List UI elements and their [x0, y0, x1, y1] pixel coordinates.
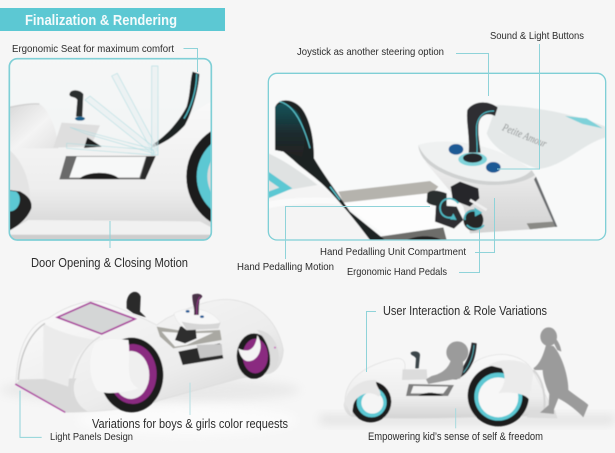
callout: ergonomic seat — [12, 43, 198, 72]
rear body — [268, 153, 378, 240]
pedalling motion arrows — [440, 199, 484, 229]
illustration: child riding and child pushing — [320, 327, 615, 428]
callout: hand pedalling unit compartment — [320, 198, 494, 258]
dashboard top — [418, 141, 532, 182]
callout: sound and light buttons — [490, 30, 584, 169]
leader line: colour variations — [188, 383, 191, 415]
silhouette: seated child — [426, 341, 468, 384]
roof light panel — [57, 303, 135, 334]
callout: door opening and closing motion: Door Opening & Closing Motion — [31, 256, 188, 270]
callout: light panels design: Light Panels Design — [50, 431, 133, 443]
cutout windows — [402, 369, 427, 380]
joystick — [458, 102, 498, 166]
main body — [16, 299, 283, 412]
rear fender — [488, 360, 533, 400]
vehicle body — [344, 354, 557, 418]
logotype on cowl: Petite Amour — [500, 121, 549, 150]
dashboard — [174, 309, 220, 330]
seat — [127, 292, 146, 317]
seat — [275, 100, 385, 240]
callout: hand pedalling motion — [237, 206, 430, 273]
title banner: Finalization & Rendering — [25, 12, 177, 29]
sound and light buttons — [449, 144, 501, 173]
pusher handle — [533, 370, 545, 417]
lower dashboard — [425, 162, 557, 233]
front hump — [9, 104, 58, 148]
right wheel — [237, 333, 271, 379]
callout: ergonomic seat: Ergonomic Seat for maximum comfort — [12, 43, 174, 55]
callout: ergonomic hand pedals — [347, 230, 480, 278]
joystick — [192, 294, 202, 315]
heading: user interaction and role variations: User Interaction & Role Variations — [383, 304, 547, 318]
dashboard — [53, 123, 100, 148]
lower sill — [10, 220, 210, 234]
door ghost positions — [67, 66, 158, 155]
rear cargo light panel — [16, 378, 88, 412]
leader line: sense of freedom — [454, 408, 457, 428]
joystick — [69, 90, 83, 117]
callout: joystick — [297, 46, 488, 96]
callout: colour variations: Variations for boys & girls color requests — [92, 417, 288, 431]
seat — [452, 343, 477, 379]
callout: empowering sense of self: Empowering kid’s sense of self & freedom — [368, 431, 543, 443]
door opening cutout — [59, 156, 156, 179]
front fender — [10, 152, 28, 190]
vehicle body, side view — [18, 195, 210, 227]
rear wheel — [468, 365, 529, 426]
lower door bar — [373, 227, 447, 240]
callout: hand pedalling motion: Hand Pedalling Motion — [237, 261, 334, 273]
rear wheel — [186, 130, 210, 222]
callout: hand pedalling unit compartment: Hand Pedalling Unit Compartment — [320, 246, 466, 258]
rear panels — [43, 323, 93, 387]
buttons — [186, 310, 190, 313]
title banner — [0, 8, 225, 31]
callout: ergonomic hand pedals: Ergonomic Hand Pedals — [347, 266, 447, 278]
illustration: vehicle colour variation, three-quarter view — [0, 292, 300, 437]
callout: sound and light buttons: Sound & Light Buttons — [490, 30, 584, 42]
panel: joystick and hand pedals close-up — [268, 73, 606, 240]
heading: user interaction and role variations — [366, 304, 547, 372]
door cutouts — [157, 327, 222, 348]
hand pedal unit — [427, 182, 487, 231]
front wheel — [9, 190, 32, 231]
rear cowl — [487, 105, 606, 169]
floor surface — [340, 192, 443, 235]
joystick — [411, 351, 420, 368]
front wheel — [350, 381, 391, 422]
seat — [151, 72, 199, 148]
callout: joystick: Joystick as another steering option — [297, 46, 444, 58]
upper door bar — [338, 181, 438, 203]
big wheel — [100, 338, 163, 412]
leader line: light panels — [20, 391, 42, 437]
silhouette: pushing child — [533, 327, 588, 417]
panel: door opening and closing motion — [8, 58, 212, 241]
